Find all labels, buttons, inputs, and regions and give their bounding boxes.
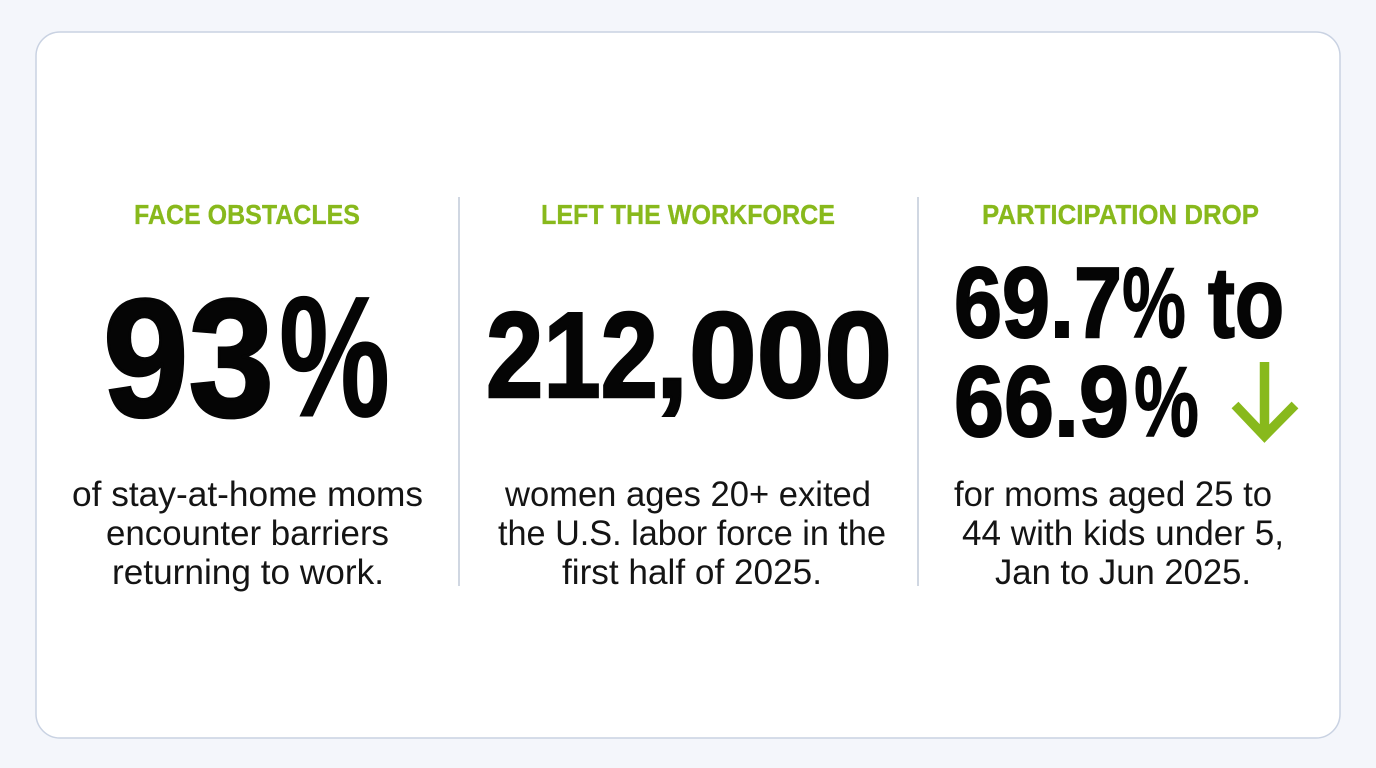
stat: 66.9%: 66.9 [954,346,1129,458]
text: description [954,475,1284,592]
text: description: returning to work. [112,553,384,592]
stat: 93% [103,261,390,453]
heading: left the workforce: LEFT THE WORKFORCE [541,199,835,230]
stat: 212,000: 000 [689,287,892,423]
icon: down arrow [1235,362,1295,438]
text: description [72,475,423,592]
text: description: first half of 2025. [562,553,822,592]
panel: left the workforce [486,199,892,592]
text: description: 44 with kids under 5, [962,514,1284,553]
stat: 212,000 [486,287,892,423]
heading: participation drop: PARTICIPATION DROP [982,199,1259,230]
panel: participation drop [954,199,1295,592]
stat: 212,000: 212 [486,287,658,423]
text: description: Jan to Jun 2025. [995,553,1251,592]
stat: 93%: 93 [103,264,274,452]
text: description: for moms aged 25 to [954,475,1272,514]
heading: face obstacles: FACE OBSTACLES [134,199,360,230]
stat: 93%: % [279,261,390,453]
stat: 69.7% to: 69.7 [954,247,1122,359]
stat: 69.7% to [954,247,1284,359]
stat: 212,000: , [656,287,688,423]
panel: face obstacles [72,199,423,592]
text: description: encounter barriers [106,514,389,553]
text: description: of stay-at-home moms [72,475,423,514]
text: description [498,475,886,592]
stat: 69.7% to: to [1208,247,1284,359]
stat: 69.7% to: % [1122,247,1186,359]
stat: 66.9%: % [1134,346,1199,458]
text: description: the U.S. labor force in the [498,514,886,553]
text: description: women ages 20+ exited [504,475,871,514]
